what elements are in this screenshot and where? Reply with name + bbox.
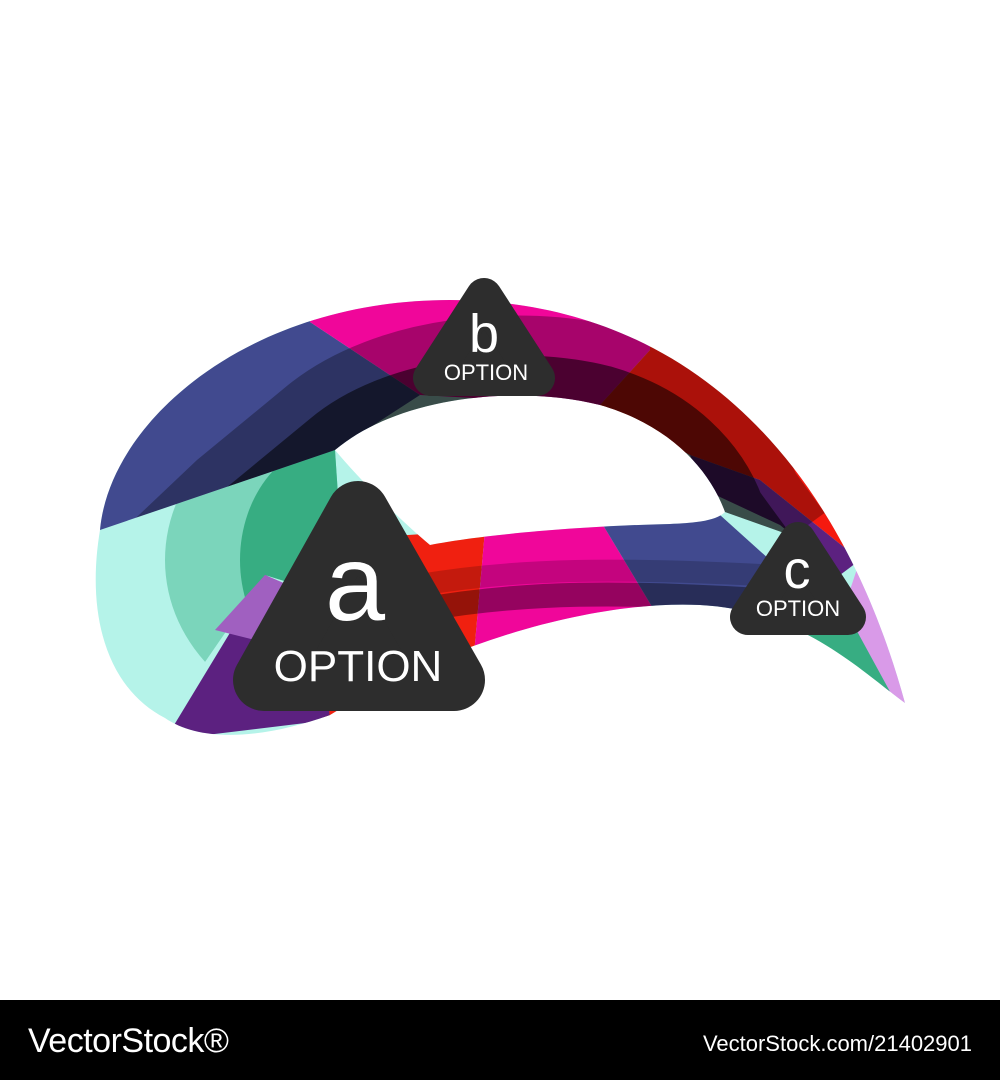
- option b marker: b: [469, 304, 499, 364]
- footer bar: [0, 1000, 1000, 1080]
- option b marker: OPTION: [444, 360, 528, 385]
- option c marker: c: [784, 540, 810, 600]
- footer bar: VectorStock®: [28, 1022, 229, 1060]
- option a marker: OPTION: [274, 642, 442, 691]
- option a marker: a: [325, 522, 386, 643]
- ribbon shape: [96, 300, 905, 735]
- infographic graphic: [0, 278, 1000, 1080]
- option a marker: [264, 512, 454, 691]
- footer bar: VectorStock.com/21402901: [703, 1031, 972, 1056]
- option c marker: OPTION: [756, 596, 840, 621]
- option b marker: [431, 296, 537, 385]
- option c marker: [748, 540, 848, 621]
